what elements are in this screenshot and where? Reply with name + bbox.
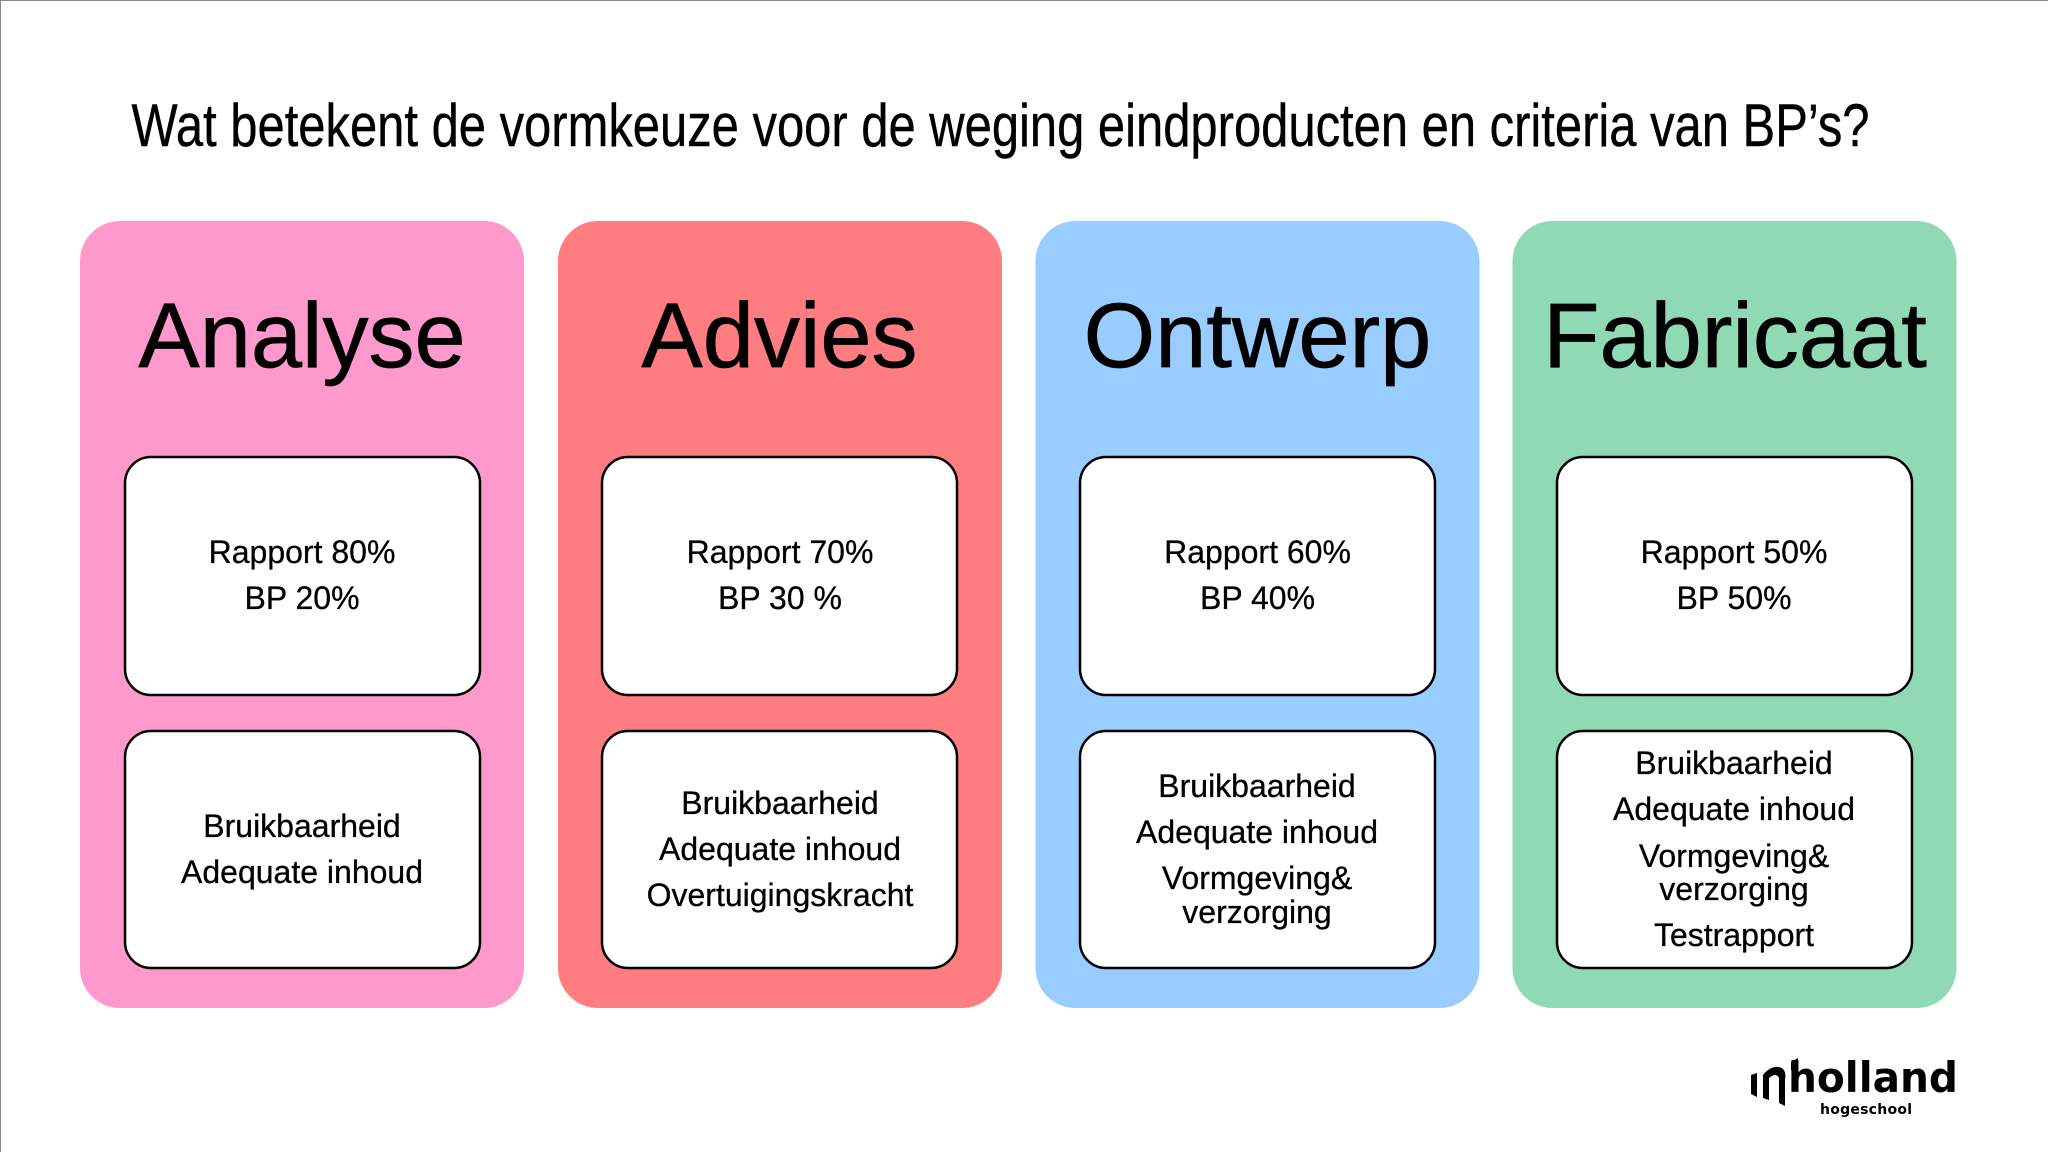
weighting box: Analyse (125, 457, 480, 695)
heading: Analyse: Analyse (138, 285, 466, 387)
weighting box: Advies: BP 30 % (718, 580, 842, 616)
criteria box: Advies: Adequate inhoud (659, 831, 901, 867)
criteria box: Fabricaat: Vormgeving& (1639, 838, 1829, 874)
weighting box: Fabricaat: BP 50% (1676, 580, 1792, 616)
criteria box: Analyse: Adequate inhoud (181, 854, 423, 890)
weighting box: Ontwerp (1080, 457, 1435, 695)
criteria box: Fabricaat: verzorging (1659, 871, 1809, 907)
weighting box: Fabricaat (1557, 457, 1912, 695)
heading: Ontwerp: Ontwerp (1084, 285, 1431, 387)
weighting box: Advies (602, 457, 957, 695)
weighting box: Analyse: Rapport 80% (209, 534, 395, 570)
weighting box: Advies: Rapport 70% (687, 534, 873, 570)
panel: Fabricaat (1512, 221, 1956, 1008)
icon: inholland mark (1751, 1058, 1798, 1106)
criteria box: Advies: Bruikbaarheid (681, 785, 879, 821)
logo: inholland hogeschool: hogeschool (1820, 1102, 1912, 1118)
weighting box: Fabricaat: Rapport 50% (1641, 534, 1827, 570)
criteria box: Fabricaat: Testrapport (1654, 917, 1814, 953)
criteria box: Fabricaat: Adequate inhoud (1613, 791, 1855, 827)
weighting box: Analyse: BP 20% (244, 580, 360, 616)
criteria box: Ontwerp: verzorging (1182, 894, 1332, 930)
criteria box: Fabricaat (1557, 731, 1912, 968)
panel: Ontwerp (1036, 221, 1480, 1008)
criteria box: Ontwerp: Vormgeving& (1162, 860, 1352, 896)
criteria box: Ontwerp (1080, 731, 1435, 968)
logo: inholland hogeschool: holland (1788, 1053, 1958, 1102)
criteria box: Ontwerp: Adequate inhoud (1136, 814, 1378, 850)
criteria box: Analyse: Bruikbaarheid (203, 808, 401, 844)
panel: Advies (558, 221, 1002, 1008)
weighting box: Ontwerp: Rapport 60% (1164, 534, 1351, 570)
panel: Analyse (80, 221, 524, 1008)
heading: Advies: Advies (641, 285, 918, 387)
criteria box: Ontwerp: Bruikbaarheid (1158, 768, 1356, 804)
heading: Fabricaat: Fabricaat (1543, 285, 1927, 387)
criteria box: Advies: Overtuigingskracht (647, 877, 914, 913)
criteria box: Fabricaat: Bruikbaarheid (1635, 745, 1833, 781)
weighting box: Ontwerp: BP 40% (1200, 580, 1315, 616)
criteria box: Advies (602, 731, 957, 968)
logo: inholland hogeschool (1751, 1053, 1958, 1118)
criteria box: Analyse (125, 731, 480, 968)
